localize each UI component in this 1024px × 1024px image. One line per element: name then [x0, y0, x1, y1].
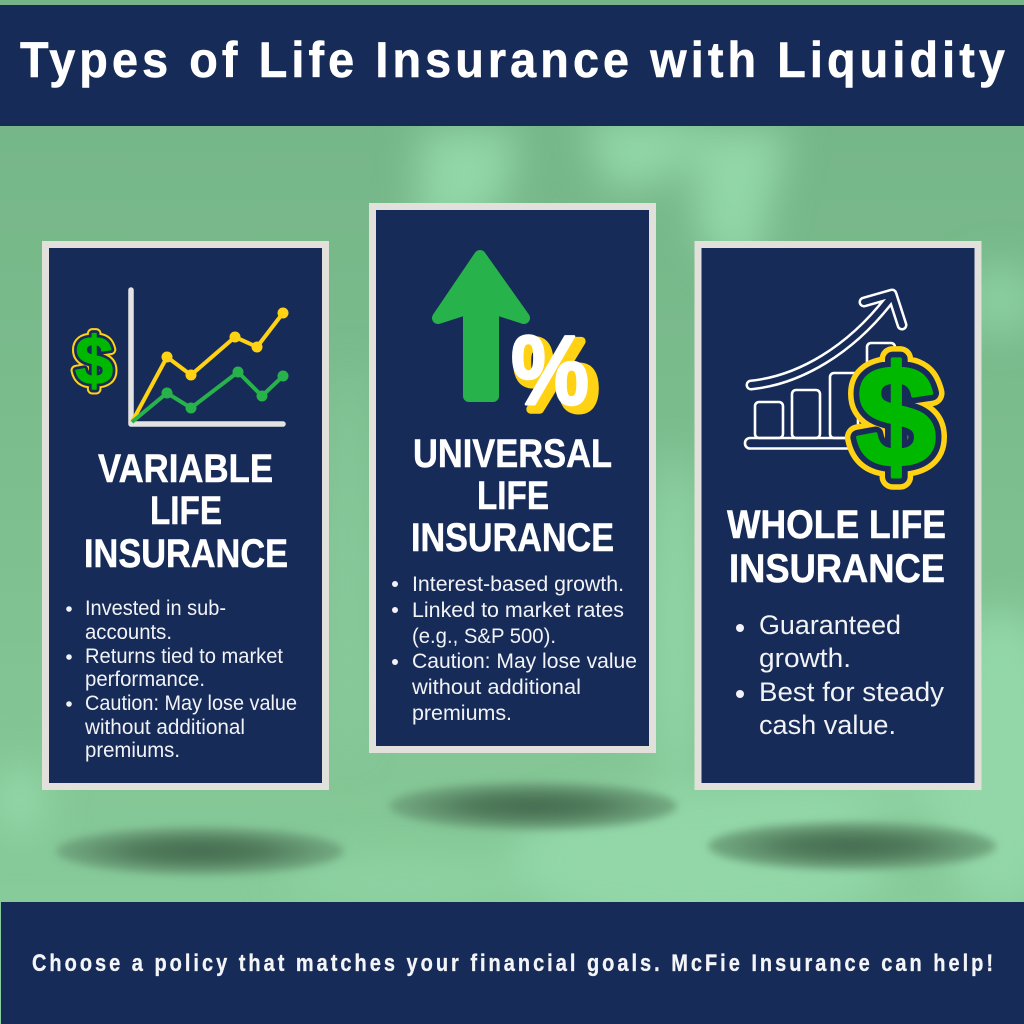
bullet list: variable: premiums.: [85, 739, 180, 762]
bullet list: variable: performance.: [85, 668, 205, 691]
bullet list: variable: [66, 597, 297, 762]
bullet list: whole: cash value.: [759, 710, 896, 740]
icon: line chart with dollar sign: $: [75, 323, 113, 399]
bullet list: variable: Caution: May lose value: [85, 692, 297, 715]
panel: universal life insurance: [372, 206, 652, 750]
heading: universal life insurance: UNIVERSAL: [413, 432, 612, 476]
heading: variable life insurance: VARIABLE: [98, 447, 273, 491]
icon: up arrow with percent: %: [511, 315, 589, 425]
heading: whole life insurance: WHOLE LIFE: [727, 503, 946, 547]
icon: growth bars with dollar sign: [745, 294, 936, 497]
bullet list: variable: Returns tied to market: [85, 645, 283, 668]
bullet list: variable: without additional: [84, 716, 245, 739]
bullet list: whole: Guaranteed: [759, 610, 901, 640]
icon: up arrow with percent: [438, 256, 597, 430]
bullet list: whole: growth.: [759, 643, 851, 673]
heading: universal life insurance: [411, 432, 614, 560]
panel: variable life insurance: [46, 244, 326, 786]
bullet list: variable: accounts.: [85, 621, 172, 644]
heading: universal life insurance: LIFE: [477, 474, 549, 518]
icon: line chart with dollar sign: $: [75, 323, 113, 399]
heading: whole life insurance: [727, 503, 946, 591]
icon: line chart with dollar sign: $: [75, 323, 113, 399]
bullet list: variable: Invested in sub-: [85, 597, 226, 620]
shadow under right card: [708, 822, 996, 870]
heading: universal life insurance: INSURANCE: [411, 516, 614, 560]
icon: growth bars with dollar sign: $: [856, 336, 936, 497]
bullet list: whole: [736, 610, 945, 740]
bullet list: whole: Best for steady: [759, 677, 945, 707]
heading: variable life insurance: [84, 447, 288, 576]
shadow under middle card: [389, 782, 677, 830]
title banner: [0, 5, 1024, 126]
heading: variable life insurance: INSURANCE: [84, 532, 288, 576]
bullet list: universal: without additional: [411, 675, 581, 699]
bullet list: universal: Linked to market rates: [412, 598, 624, 622]
panel: whole life insurance: [698, 244, 978, 786]
heading: variable life insurance: LIFE: [150, 489, 222, 533]
icon: growth bars with dollar sign: $: [856, 336, 936, 497]
bullet list: universal: Interest-based growth.: [412, 572, 624, 596]
bullet list: universal: Caution: May lose value: [412, 649, 637, 673]
footer banner: [1, 902, 1024, 1024]
icon: growth bars with dollar sign: $: [856, 336, 936, 497]
icon: line chart with dollar sign: [75, 290, 288, 424]
bullet list: universal: premiums.: [412, 701, 512, 725]
heading: whole life insurance: INSURANCE: [729, 547, 945, 591]
bullet list: universal: [392, 572, 637, 725]
shadow under left card: [56, 827, 344, 875]
bullet list: universal: (e.g., S&P 500).: [412, 624, 556, 648]
icon: up arrow with percent: %: [515, 320, 597, 430]
